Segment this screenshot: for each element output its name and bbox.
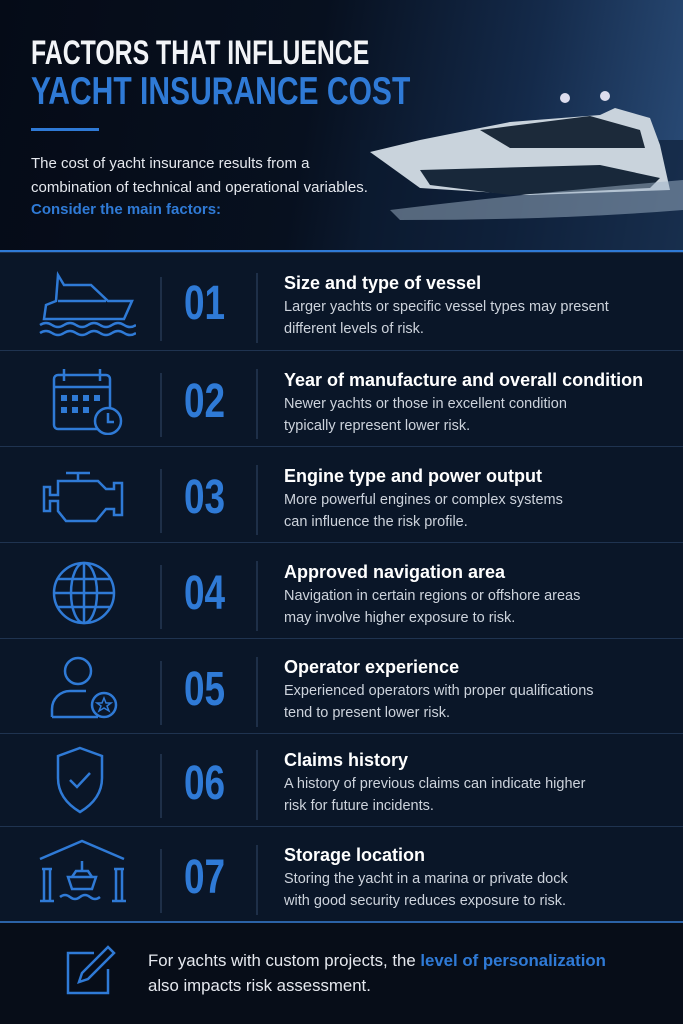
row 02 [0,350,683,446]
icon: shield [56,746,104,814]
row 01: Larger yachts or specific vessel types may present [284,299,609,315]
row 07: with good security reduces exposure to risk. [284,893,566,909]
intro text: combination of technical and operational variables. [31,179,368,196]
footer callout [0,923,683,1024]
header panel: YACHT INSURANCE COST [31,70,410,113]
number: 06 [184,757,225,810]
row 04 [0,542,683,638]
footer text [148,951,606,995]
number: 05 [184,663,225,716]
text: Storage location [284,845,425,865]
title: FACTORS THAT INFLUENCE [31,34,369,72]
row 03: can influence the risk profile. [284,514,468,530]
text: Approved navigation area [284,562,505,582]
footer text: also impacts risk assessment. [148,976,371,995]
icon: calendar [52,369,122,435]
text: Size and type of vessel [284,273,481,293]
number: 04 [184,567,225,620]
icon: operator [50,656,118,718]
icon: globe [52,562,116,624]
number: 03 [184,471,225,524]
header panel [0,0,683,252]
boat image [370,91,683,250]
icon: engine [42,472,124,522]
text: Year of manufacture and overall condition [284,370,643,390]
row 06: risk for future incidents. [284,798,434,814]
icon: yacht [39,271,136,336]
row 02: Newer yachts or those in excellent condition [284,396,567,412]
row 03: More powerful engines or complex systems [284,492,563,508]
row 06 [0,733,683,826]
icon: edit [66,945,116,994]
row 04: Navigation in certain regions or offshore areas [284,588,580,604]
row 02: typically represent lower risk. [284,418,470,434]
intro text [31,155,368,196]
row 06: A history of previous claims can indicate higher [284,776,585,792]
number: 01 [184,277,225,330]
row 04: may involve higher exposure to risk. [284,610,515,626]
row 05: Experienced operators with proper qualifications [284,683,594,699]
text: Operator experience [284,657,459,677]
row 07 [0,826,683,922]
intro text: The cost of yacht insurance results from a [31,155,309,172]
row 03 [0,446,683,542]
sub heading: Consider the main factors: [31,201,221,218]
icon: storage [40,840,126,902]
number: 02 [184,375,225,428]
row 05: tend to present lower risk. [284,705,450,721]
text: Engine type and power output [284,466,542,486]
row 07: Storing the yacht in a marina or private dock [284,871,568,887]
number: 07 [184,851,225,904]
row 01: different levels of risk. [284,321,424,337]
footer text: For yachts with custom projects, the level of personalization [148,951,606,970]
row 01 [0,252,683,350]
row 05 [0,638,683,733]
text: Claims history [284,750,408,770]
